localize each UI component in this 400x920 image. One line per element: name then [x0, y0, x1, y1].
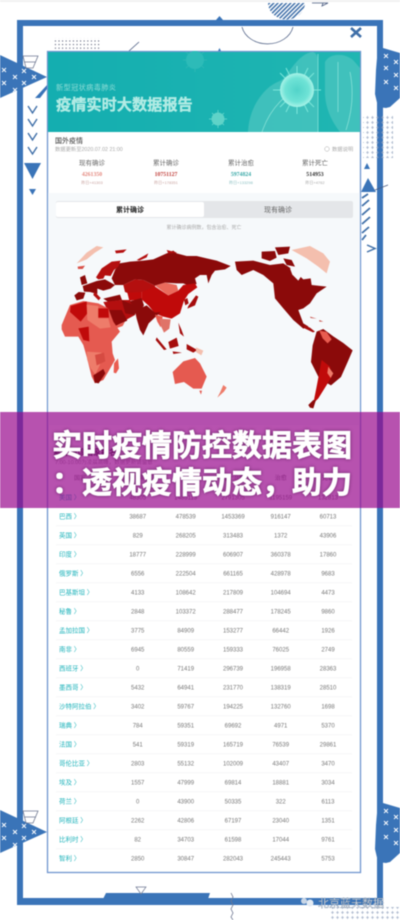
row: 59351 [177, 724, 195, 730]
Congo [87, 352, 102, 375]
Middle East [103, 300, 137, 327]
row: 埃及 〉 [59, 778, 80, 786]
decoration: left chevrons and triangles [24, 85, 47, 195]
row: 0 [136, 800, 140, 806]
row: 美国 〉 [59, 492, 80, 502]
lungs illustration [248, 52, 360, 132]
Myanmar [155, 315, 163, 327]
summary statistics: 累计确诊 [153, 158, 180, 167]
row [59, 512, 337, 520]
row: 322 [276, 800, 286, 806]
Turkey [103, 295, 122, 302]
update time: 数据更新至2020.07.02 21:00 [55, 145, 123, 153]
row: 1453369 [221, 514, 245, 520]
row: 2848 [131, 610, 145, 616]
row: 28510 [320, 686, 337, 692]
row: 俄罗斯 〉 [59, 568, 87, 578]
summary statistics: 10751127 [155, 172, 178, 178]
row: 4473 [321, 590, 335, 596]
Saudi Arabia [108, 310, 127, 326]
Indonesia [156, 337, 197, 354]
decoration: bottom right spotted blob [375, 803, 400, 863]
row: 17860 [320, 552, 337, 558]
row: 38687 [129, 514, 147, 520]
row [59, 530, 337, 540]
icon: virus faint [183, 51, 207, 72]
row: 9860 [321, 610, 335, 616]
row: 智利 〉 [59, 854, 80, 862]
icon: virus small [209, 110, 227, 128]
decoration: top shapes [53, 3, 328, 55]
row: 60713 [320, 514, 337, 520]
row: 69814 [225, 780, 242, 786]
tabs: 累计确诊 [116, 205, 144, 214]
row: 1698 [321, 704, 335, 710]
India [135, 305, 161, 335]
UK [80, 275, 87, 285]
row [59, 492, 339, 502]
Algeria and Morocco [70, 301, 87, 322]
New Guinea [196, 347, 203, 355]
row: 4133 [131, 590, 145, 596]
row: 1195159 [269, 496, 293, 502]
row [59, 684, 337, 692]
Italy [93, 291, 101, 300]
icon: cross top right [351, 28, 361, 37]
Canada, USA, Mexico [235, 261, 327, 329]
summary statistics: 4261350 [82, 172, 102, 178]
row: 138319 [271, 686, 291, 692]
row: 478539 [176, 514, 196, 520]
decoration: right triangles, stripes and chevron [361, 163, 388, 252]
decoration: top right spotted blob [375, 48, 400, 108]
row: 313483 [223, 534, 244, 540]
Spain [74, 292, 85, 300]
row: 巴基斯坦 〉 [59, 588, 93, 596]
decoration: bottom band shapes [103, 887, 400, 920]
row: 231770 [223, 686, 244, 692]
row: 102009 [223, 762, 244, 768]
top edge strip [0, 0, 400, 2]
row: 2749 [321, 648, 335, 654]
Svalbard and Iceland [77, 246, 103, 263]
row: 6556 [131, 572, 145, 578]
row: 84909 [177, 628, 195, 634]
summary statistics: 现有确诊 [79, 158, 106, 167]
row: 30847 [177, 856, 195, 862]
Colombia and Venezuela [319, 331, 332, 343]
row: 3034 [321, 780, 335, 786]
New Zealand [217, 385, 227, 398]
row: 1485113 [174, 496, 198, 502]
Chile tip [308, 400, 316, 408]
Greenland [292, 246, 330, 273]
watermark: 北京蓝天数据 [318, 896, 384, 910]
row: 18881 [272, 780, 290, 786]
summary statistics: 累计治愈 [228, 158, 254, 167]
row [59, 834, 335, 844]
row: 159333 [223, 648, 244, 654]
row: 墨西哥 〉 [59, 684, 87, 692]
row: 0 [136, 666, 140, 672]
summary statistics [79, 158, 328, 185]
row: 64941 [177, 686, 195, 692]
row: 217809 [223, 590, 244, 596]
row: 71419 [177, 666, 195, 672]
row: 印度 〉 [59, 550, 80, 558]
row: 17044 [272, 838, 290, 844]
summary statistics: 昨日+178351 [154, 179, 179, 185]
tabs: 现有确诊 [264, 205, 292, 214]
table header: 国家 [74, 474, 86, 482]
row: 76539 [272, 742, 290, 748]
headline: ：透视疫情动态，助力 [52, 467, 352, 500]
row: 23040 [272, 818, 290, 824]
row: 沙特阿拉伯 〉 [59, 702, 100, 710]
Indochina [159, 319, 171, 333]
row: 50335 [225, 800, 242, 806]
summary statistics: 昨日+4762 [305, 179, 325, 185]
Russia [112, 251, 231, 286]
row [59, 720, 335, 730]
row: 59319 [177, 742, 195, 748]
row: 5432 [131, 686, 145, 692]
Australia [173, 358, 207, 389]
icon: virus large [273, 66, 321, 114]
headline [52, 430, 352, 500]
row: 2850 [131, 856, 145, 862]
row [59, 854, 335, 862]
row: 1557 [131, 780, 145, 786]
row: 法国 〉 [59, 740, 80, 748]
row: 108642 [176, 590, 196, 596]
table section note: 7.00-10.00为凌晨高峰，数据更新请留意 [55, 458, 153, 466]
row: 哥伦比亚 〉 [59, 758, 93, 768]
purple title band [0, 412, 400, 508]
row: 英国 〉 [59, 530, 80, 540]
table header: 治愈 [275, 474, 287, 482]
row: 28363 [320, 666, 337, 672]
row: 82 [134, 838, 142, 844]
Mongolia [155, 283, 178, 295]
table header [74, 474, 334, 482]
summary statistics: 昨日+41303 [81, 179, 103, 185]
row: 196958 [271, 666, 291, 672]
row: 南非 〉 [59, 644, 80, 654]
Paraguay and Uruguay [327, 367, 333, 378]
Central America [303, 325, 315, 332]
row: 2262 [131, 818, 145, 824]
row: 360378 [271, 552, 291, 558]
headline: 实时疫情防控数据表图 [52, 430, 352, 463]
decoration: dotted plus grid right [363, 115, 393, 158]
summary statistics: 昨日+133298 [229, 179, 254, 185]
row: 47999 [177, 780, 195, 786]
row: 132760 [271, 704, 291, 710]
summary statistics: 5974824 [231, 172, 251, 178]
row: 104694 [271, 590, 291, 596]
Africa [62, 301, 120, 383]
data note: 数据说明 [332, 145, 353, 153]
table header: 累计确诊 [174, 474, 198, 482]
Pakistan and Afghanistan [129, 298, 144, 315]
row: 153277 [223, 628, 244, 634]
row: 2791305 [221, 496, 245, 502]
row [59, 740, 337, 748]
row: 428978 [271, 572, 291, 578]
row: 245443 [271, 856, 291, 862]
row: 6945 [131, 648, 145, 654]
row: 194225 [223, 704, 244, 710]
row: 西班牙 〉 [59, 664, 87, 672]
row: 228999 [176, 552, 196, 558]
row: 阿根廷 〉 [59, 816, 87, 824]
row: 孟加拉国 〉 [59, 626, 93, 634]
row: 1372 [274, 534, 288, 540]
China [142, 283, 197, 319]
row: 4971 [274, 724, 288, 730]
row: 42806 [177, 818, 195, 824]
row: 43407 [272, 762, 290, 768]
Madagascar [114, 358, 119, 373]
row [59, 816, 335, 824]
row: 3775 [131, 628, 145, 634]
row: 67197 [225, 818, 242, 824]
row: 829 [133, 534, 143, 540]
Canadian Arctic [262, 247, 295, 267]
row: 43906 [320, 534, 337, 540]
row: 61598 [225, 838, 242, 844]
section heading: 国外疫情 [55, 136, 83, 145]
row: 76025 [272, 648, 290, 654]
Nigeria [78, 327, 89, 341]
row: 69692 [225, 724, 242, 730]
row [59, 664, 337, 672]
row [59, 568, 335, 578]
row: 103372 [176, 610, 196, 616]
tabs [56, 201, 353, 218]
row: 48305 [129, 496, 147, 502]
table header: 现有确诊 [126, 474, 150, 482]
panel: report card [48, 51, 360, 872]
banner [48, 51, 360, 132]
row: 43900 [177, 800, 195, 806]
row: 29861 [320, 742, 337, 748]
decoration: bottom left spotted triangle [0, 810, 47, 853]
Kazakhstan [123, 279, 155, 295]
row: 606907 [223, 552, 244, 558]
summary statistics: 累计死亡 [302, 158, 328, 167]
row [59, 550, 337, 558]
row [59, 644, 335, 654]
row: 55132 [177, 762, 195, 768]
row: 59767 [177, 704, 195, 710]
map caption: 累计确诊病例数，包含治愈、死亡 [166, 224, 242, 231]
Yemen [114, 322, 125, 329]
Hudson Bay [290, 268, 301, 281]
Iran [122, 300, 137, 315]
Egypt [98, 308, 109, 318]
Philippines [178, 323, 184, 337]
row: 66442 [272, 628, 290, 634]
row: 3402 [131, 704, 145, 710]
table section heading: 累计确诊国家排名 [53, 447, 117, 457]
Caribbean [310, 317, 323, 322]
map panel background [48, 193, 360, 425]
row [59, 778, 335, 786]
row: 荷兰 〉 [59, 796, 80, 806]
row: 3470 [321, 762, 335, 768]
row: 秘鲁 〉 [59, 606, 80, 616]
row: 9683 [321, 572, 335, 578]
row: 288477 [223, 610, 244, 616]
row: 222504 [176, 572, 196, 578]
row [59, 626, 335, 634]
South Africa [93, 369, 105, 383]
table header: 死亡 [322, 474, 334, 482]
world map [62, 246, 353, 408]
row: 296739 [223, 666, 244, 672]
row: 34703 [177, 838, 195, 844]
row: 661165 [223, 572, 243, 578]
row [59, 606, 335, 616]
data table [56, 492, 352, 862]
row: 282043 [223, 856, 244, 862]
data note [325, 145, 353, 153]
row: 瑞典 〉 [59, 720, 80, 730]
Western Europe [83, 279, 115, 294]
row: 5370 [321, 724, 335, 730]
banner subtitle: 新型冠状病毒肺炎 [56, 83, 116, 92]
Korea and Japan [184, 295, 198, 309]
row: 1926 [321, 628, 335, 634]
row [59, 758, 335, 768]
Scandinavia [96, 261, 121, 279]
row: 784 [133, 724, 143, 730]
row [59, 588, 335, 596]
row: 80559 [177, 648, 195, 654]
row: 比利时 〉 [59, 834, 87, 844]
row: 2803 [131, 762, 145, 768]
row: 9761 [321, 838, 335, 844]
South America [311, 329, 353, 385]
watermark [301, 896, 384, 910]
Arctic islands Russia [115, 249, 177, 261]
row: 132813 [318, 496, 339, 502]
row: 178245 [271, 610, 291, 616]
row: 18777 [129, 552, 147, 558]
decoration: top left spotted triangle [0, 55, 47, 98]
row: 541 [133, 742, 143, 748]
row: 916147 [271, 514, 291, 520]
summary statistics: 514953 [306, 172, 324, 178]
table header: 累计治愈 [221, 474, 245, 482]
row: 1351 [321, 818, 335, 824]
row: 6113 [322, 800, 335, 806]
row: 巴西 〉 [59, 512, 80, 520]
row: 5753 [321, 856, 335, 862]
Argentina [313, 360, 332, 403]
Libya and Sudan [87, 305, 111, 329]
Central Asia [127, 292, 142, 301]
row [59, 796, 335, 806]
row: 268205 [176, 534, 196, 540]
banner title: 疫情实时大数据报告 [56, 96, 193, 114]
row [59, 702, 335, 710]
row: 165719 [223, 742, 244, 748]
